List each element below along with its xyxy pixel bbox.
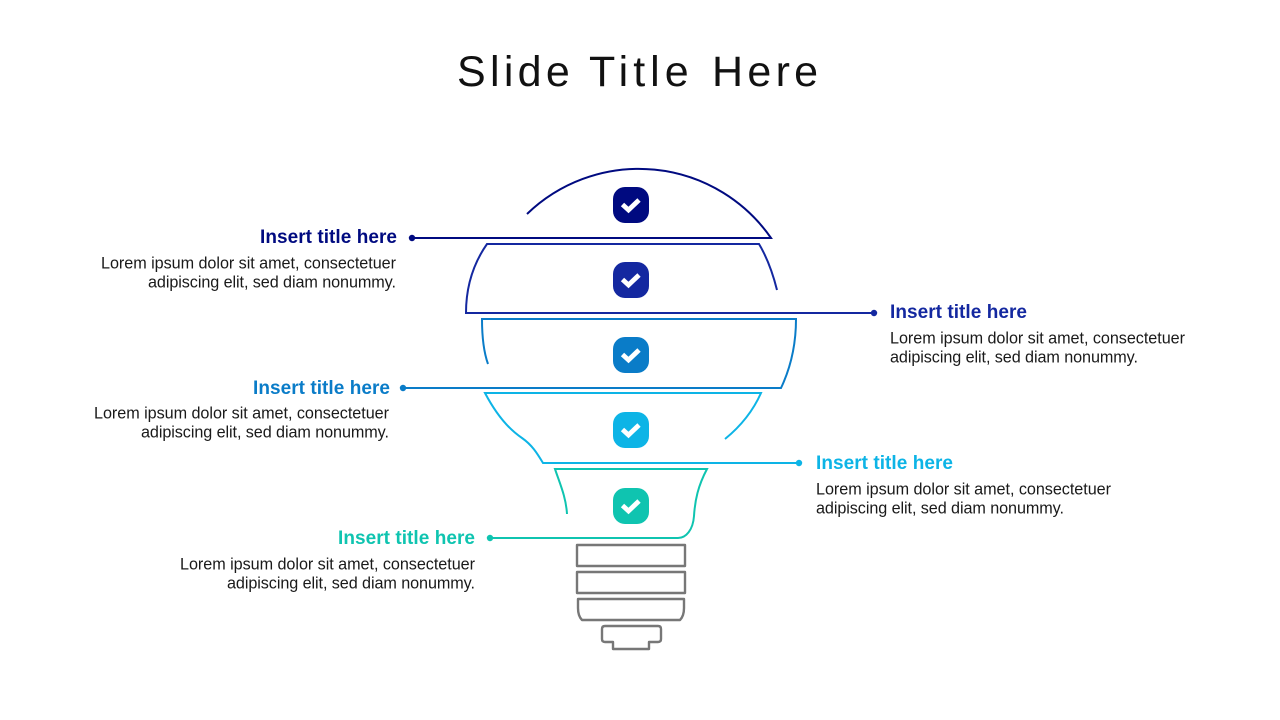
text block 5: Lorem ipsum dolor sit amet, consectetuer xyxy=(180,556,476,574)
bulb segment 2 xyxy=(466,244,877,316)
title: Slide xyxy=(457,48,574,96)
text block 5: adipiscing elit, sed diam nonummy. xyxy=(227,574,475,592)
icon: check badge 3 xyxy=(613,337,649,373)
text block 2 xyxy=(890,302,1186,366)
text block 4: Lorem ipsum dolor sit amet, consectetuer xyxy=(816,480,1112,498)
bulb segment 4 xyxy=(485,393,802,466)
text block 1: Lorem ipsum dolor sit amet, consectetuer xyxy=(101,254,397,272)
text block 4 xyxy=(816,453,1112,518)
text block 5 xyxy=(180,528,476,592)
icon: check badge 5 xyxy=(613,488,649,524)
text block 2: Lorem ipsum dolor sit amet, consectetuer xyxy=(890,330,1186,348)
icon: check badge 2 xyxy=(613,262,649,298)
text block 3: Lorem ipsum dolor sit amet, consectetuer xyxy=(94,404,390,422)
text block 1: Insert title here xyxy=(260,227,397,248)
text block 2: Insert title here xyxy=(890,302,1027,323)
icon: check badge 1 xyxy=(613,187,649,223)
bulb segment 1 xyxy=(409,169,771,241)
bulb segment 5 xyxy=(487,469,707,541)
bulb segment 3 xyxy=(400,319,796,391)
icon: check badge 4 xyxy=(613,412,649,448)
text block 1: adipiscing elit, sed diam nonummy. xyxy=(148,274,396,292)
text block 5: Insert title here xyxy=(338,528,475,549)
bulb base xyxy=(577,545,685,649)
title: Title xyxy=(589,48,694,96)
text block 3 xyxy=(94,378,390,442)
text block 4: Insert title here xyxy=(816,453,953,474)
text block 4: adipiscing elit, sed diam nonummy. xyxy=(816,500,1064,518)
text block 1 xyxy=(101,227,397,292)
title: Here xyxy=(712,48,822,96)
text block 3: adipiscing elit, sed diam nonummy. xyxy=(141,424,389,442)
text block 2: adipiscing elit, sed diam nonummy. xyxy=(890,348,1138,366)
text block 3: Insert title here xyxy=(253,378,390,399)
